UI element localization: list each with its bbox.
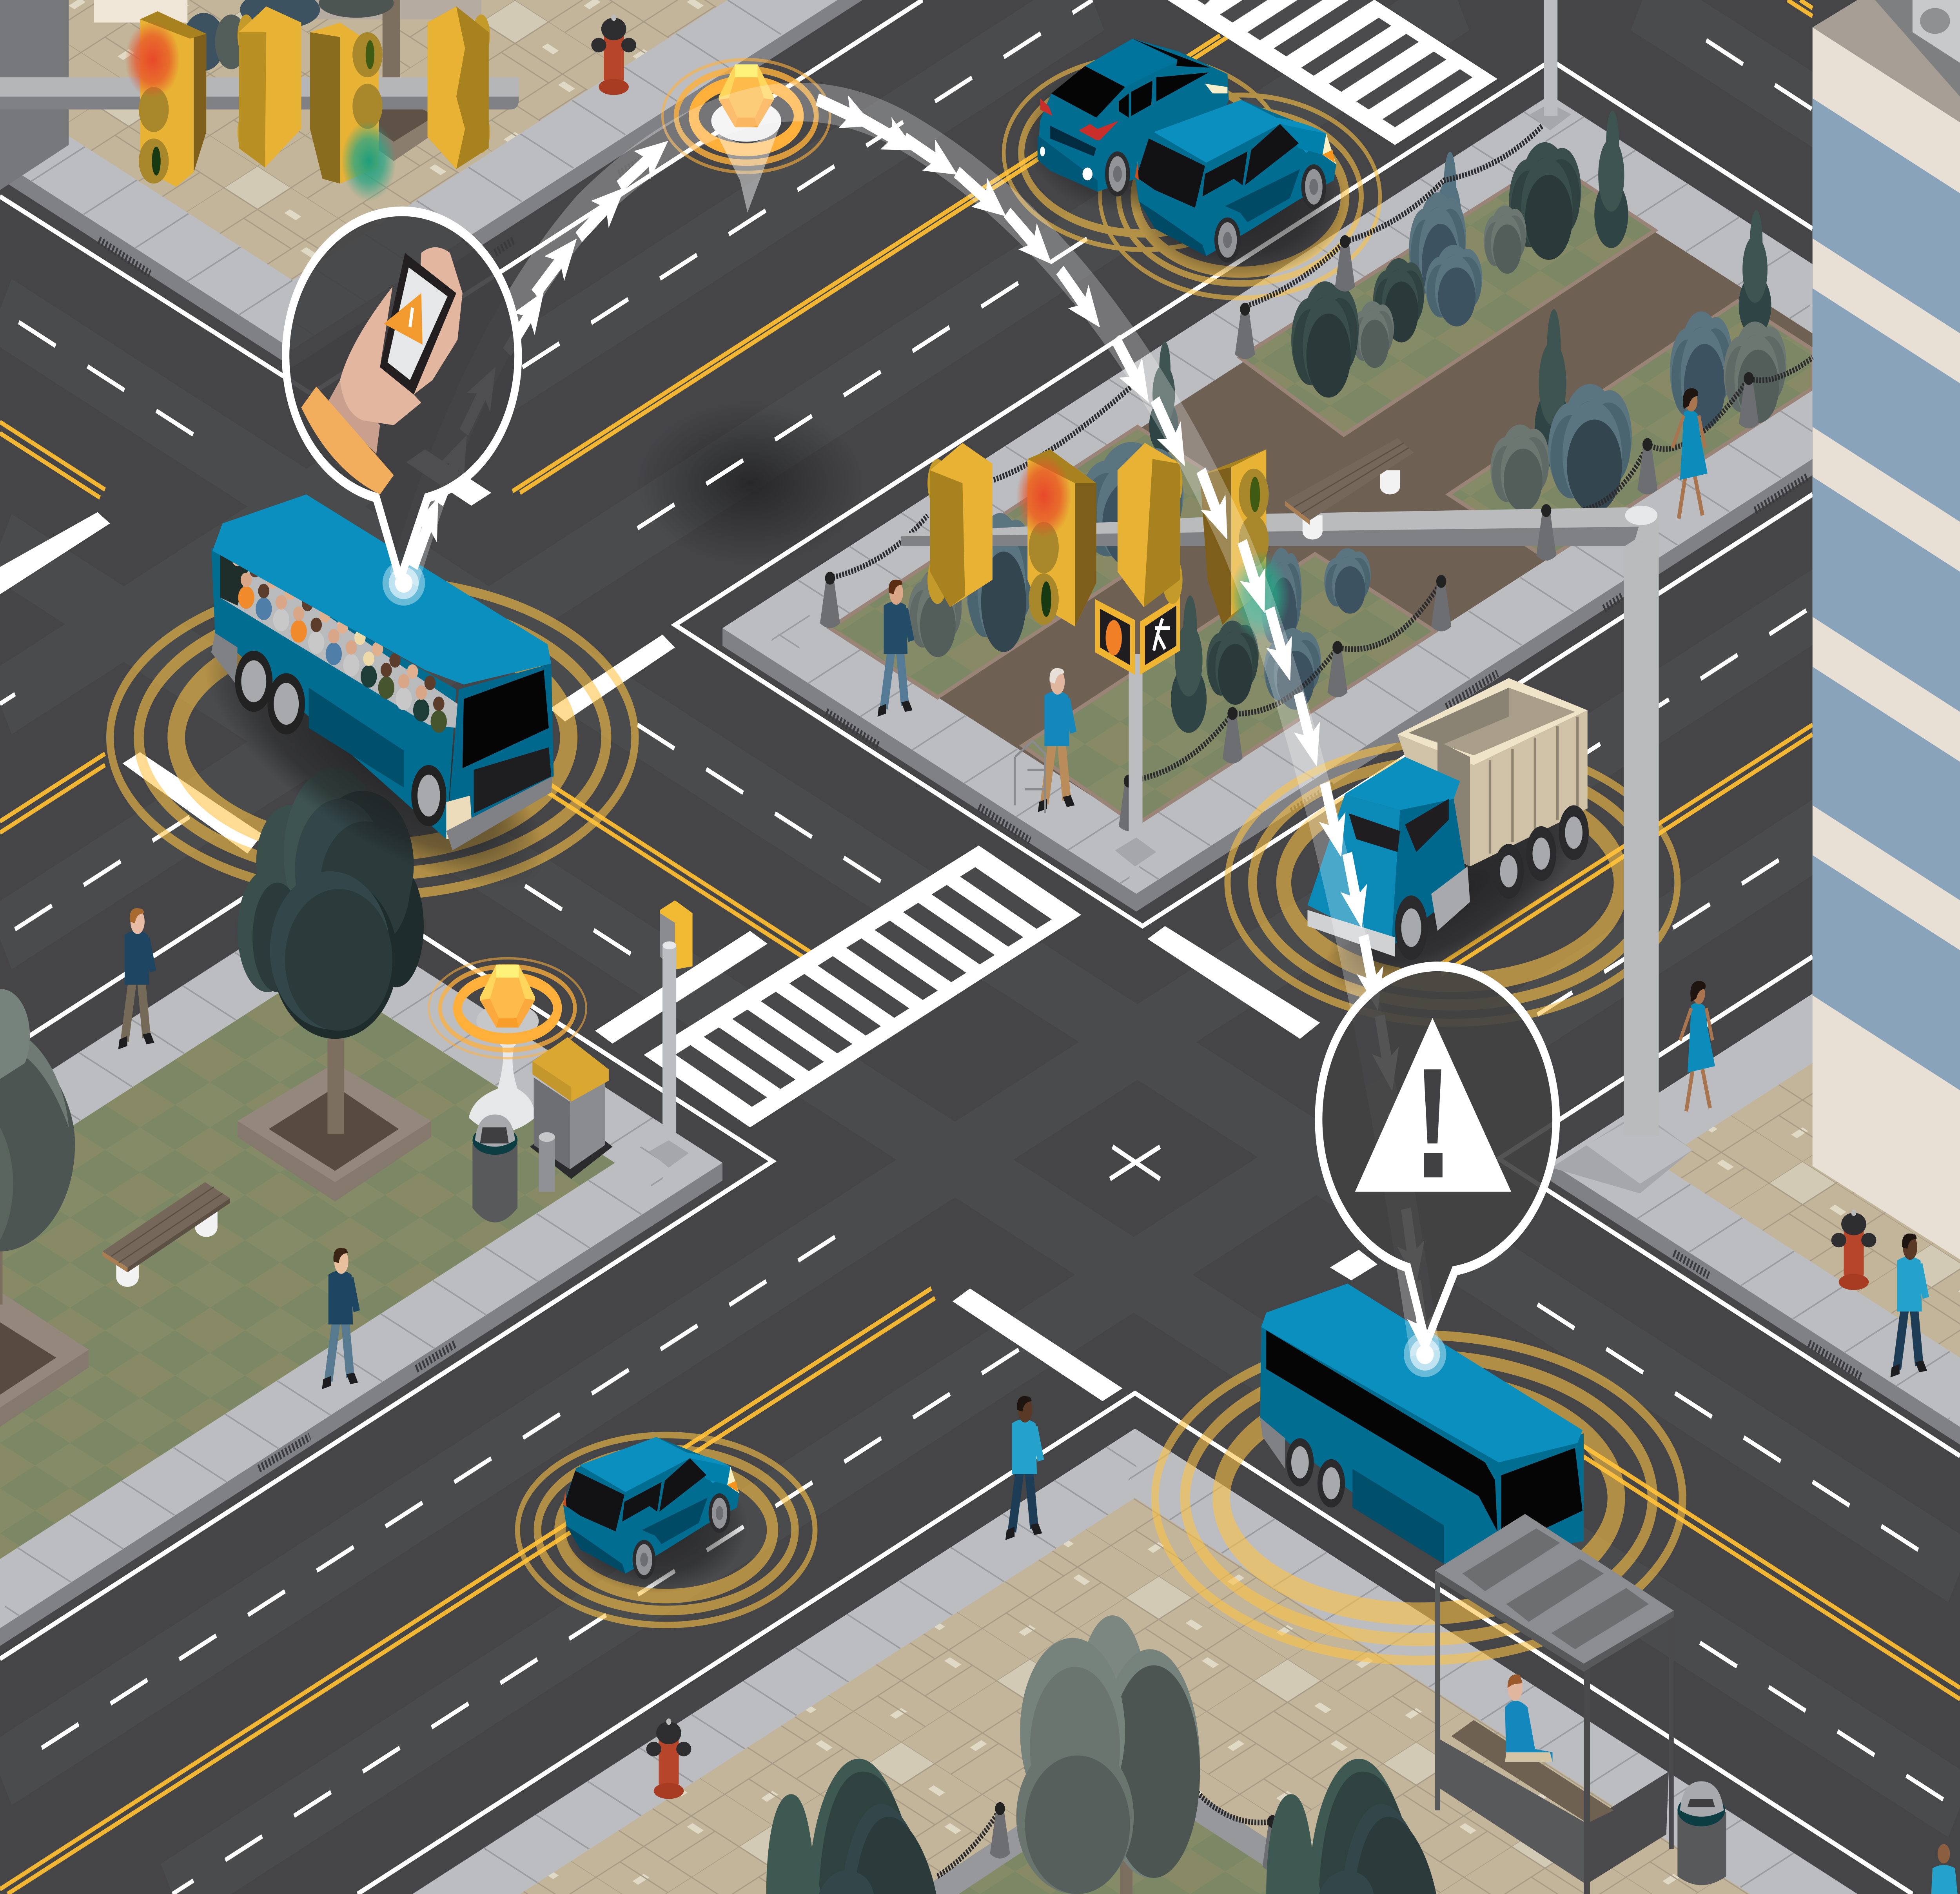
hydrant right xyxy=(1831,1210,1876,1290)
signal cabinet xyxy=(530,1037,612,1179)
block: right plaza xyxy=(1550,994,1960,1445)
traffic light: top-left green xyxy=(310,23,396,201)
park plants xyxy=(908,111,1786,733)
top crosswalk xyxy=(1167,0,1497,145)
gantry: central signal mast and pole xyxy=(901,506,1693,1194)
chain fence: park xyxy=(820,125,1813,831)
building xyxy=(1813,0,1960,1259)
data link path: white arrows xyxy=(401,83,1440,1360)
stop bars xyxy=(0,449,1377,1401)
pedestrian: man crossing bottom xyxy=(1005,1396,1042,1540)
traffic light: top-left back 2 xyxy=(428,6,490,169)
pedestrian: woman in blue dress upper xyxy=(1673,388,1708,519)
vehicle: bus 1 xyxy=(179,494,571,938)
vehicle: blue car rear xyxy=(1025,39,1238,214)
pedestrian: woman on left sidewalk xyxy=(118,908,154,1049)
lawn beds xyxy=(830,161,1813,825)
bus shelter xyxy=(1435,1514,1674,1894)
plaza shrubs xyxy=(183,0,394,71)
tree: bottom grey xyxy=(1016,1615,1200,1894)
pedestrian: man in park xyxy=(878,580,913,717)
traffic light: central back right xyxy=(1118,443,1183,607)
seated passenger xyxy=(1505,1674,1552,1762)
traffic light: top-left back 1 xyxy=(238,6,301,167)
chain post over mast xyxy=(1536,504,1556,561)
block: top-left plaza xyxy=(0,0,862,367)
trash can right xyxy=(1677,1781,1726,1885)
tree: bottom right dark xyxy=(1266,1759,1436,1894)
corner signal pole top xyxy=(1530,0,1571,131)
tree: bottom left dark xyxy=(766,1759,936,1894)
vehicle: bus 2 xyxy=(1260,1284,1584,1564)
pedestrian: bottom right corner xyxy=(1931,1844,1958,1894)
bottom plaza planting xyxy=(766,1615,1436,1894)
bus 1 beacon xyxy=(383,561,425,606)
pedestrian: elderly man with walker xyxy=(1015,668,1074,813)
pedestrian pole with push button xyxy=(649,900,693,1168)
ring signals: bus 1 xyxy=(110,580,635,896)
trash can left xyxy=(472,1114,517,1223)
curb drain grates xyxy=(99,160,1861,1469)
rooftop xyxy=(1813,0,1960,122)
ring signals: cars xyxy=(1004,56,1380,298)
block: central park xyxy=(722,95,1813,912)
data link path: translucent band xyxy=(404,102,1425,1353)
ring signals: truck xyxy=(1227,742,1677,1023)
tree: large left lawn xyxy=(238,768,431,1201)
bench left xyxy=(102,1182,230,1287)
hydrant top xyxy=(591,15,636,95)
vehicle: dump truck xyxy=(1306,678,1606,1030)
bollard xyxy=(539,1132,555,1192)
vehicle: blue car front xyxy=(1134,100,1346,279)
park bench xyxy=(1285,438,1414,539)
callout: warning bubble xyxy=(1319,967,1556,1343)
block: lower-left lawn xyxy=(0,900,722,1646)
roadside unit top xyxy=(711,64,781,212)
gantry: top-left signal arm xyxy=(0,6,519,201)
block: bottom plaza xyxy=(412,1429,1858,1894)
traffic light: central red xyxy=(1016,449,1096,626)
bus 2 beacon xyxy=(1404,1332,1446,1377)
traffic light: central green xyxy=(1200,449,1290,641)
pedestrian signal xyxy=(1095,596,1180,867)
roadside unit lower xyxy=(429,958,586,1132)
bus windows with passengers xyxy=(220,543,457,733)
pedestrian: woman in blue dress lower xyxy=(1680,981,1715,1111)
icon: hand holding phone xyxy=(301,247,463,494)
traffic light: top-left red xyxy=(125,11,206,187)
icon: warning triangle xyxy=(1355,1018,1511,1192)
hydrant bottom xyxy=(646,1718,691,1799)
mulch paths xyxy=(830,164,1813,825)
pedestrian: man on left lawn xyxy=(322,1248,358,1389)
tree: far left xyxy=(0,989,89,1427)
ring signals: roadside unit top xyxy=(662,60,830,172)
ring signals: small car xyxy=(517,1435,815,1625)
callout: phone alert bubble xyxy=(286,211,518,580)
traffic light: central back left xyxy=(927,443,993,607)
pedestrian: man right sidewalk xyxy=(1890,1234,1927,1377)
vehicle: small blue car xyxy=(562,1437,748,1593)
main crosswalk xyxy=(644,845,1081,1127)
ring signals: bus 2 xyxy=(1155,1335,1682,1660)
